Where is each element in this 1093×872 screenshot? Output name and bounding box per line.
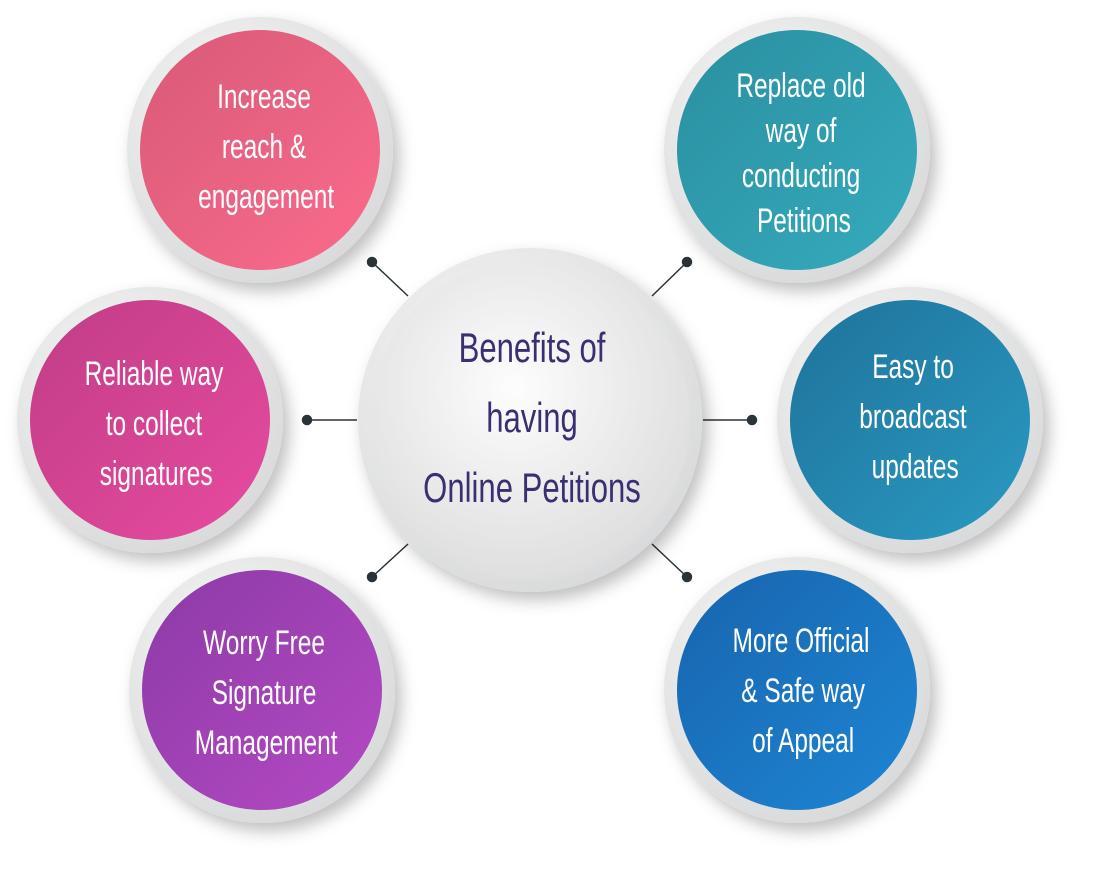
circle: worry free: Worry Free [203,624,325,662]
circle: increase reach: engagement [198,178,335,216]
circle: official safe [664,557,930,823]
circle: official safe: More Official [733,622,869,660]
circle: broadcast: updates [872,448,959,486]
circle: replace old way: way of [765,112,837,150]
circle: increase reach [127,17,393,283]
circle: replace old way: Replace old [736,67,866,105]
circle: worry free: Management [195,724,338,762]
circle: reliable way [17,287,283,553]
connectors [302,258,756,582]
center circle: Benefits of [459,324,606,371]
circle: official safe: & Safe way [741,672,865,710]
circle: reliable way: Reliable way [85,355,224,393]
circle: reliable way: signatures [100,455,213,493]
center circle: Online Petitions [423,464,641,511]
circle: broadcast: broadcast [859,398,967,436]
circle: broadcast: Easy to [872,348,954,386]
circle: worry free: Signature [212,674,316,712]
circle: broadcast [777,287,1043,553]
circle: increase reach: reach & [222,128,306,166]
circle: replace old way: Petitions [757,202,851,240]
circle: worry free [129,557,395,823]
center circle [358,248,702,592]
center circle: having [486,394,578,441]
circle: replace old way [664,17,930,283]
circle: official safe: of Appeal [752,722,854,760]
circle: increase reach: Increase [217,78,311,116]
circle: reliable way: to collect [106,405,203,443]
circle: replace old way: conducting [742,157,860,195]
